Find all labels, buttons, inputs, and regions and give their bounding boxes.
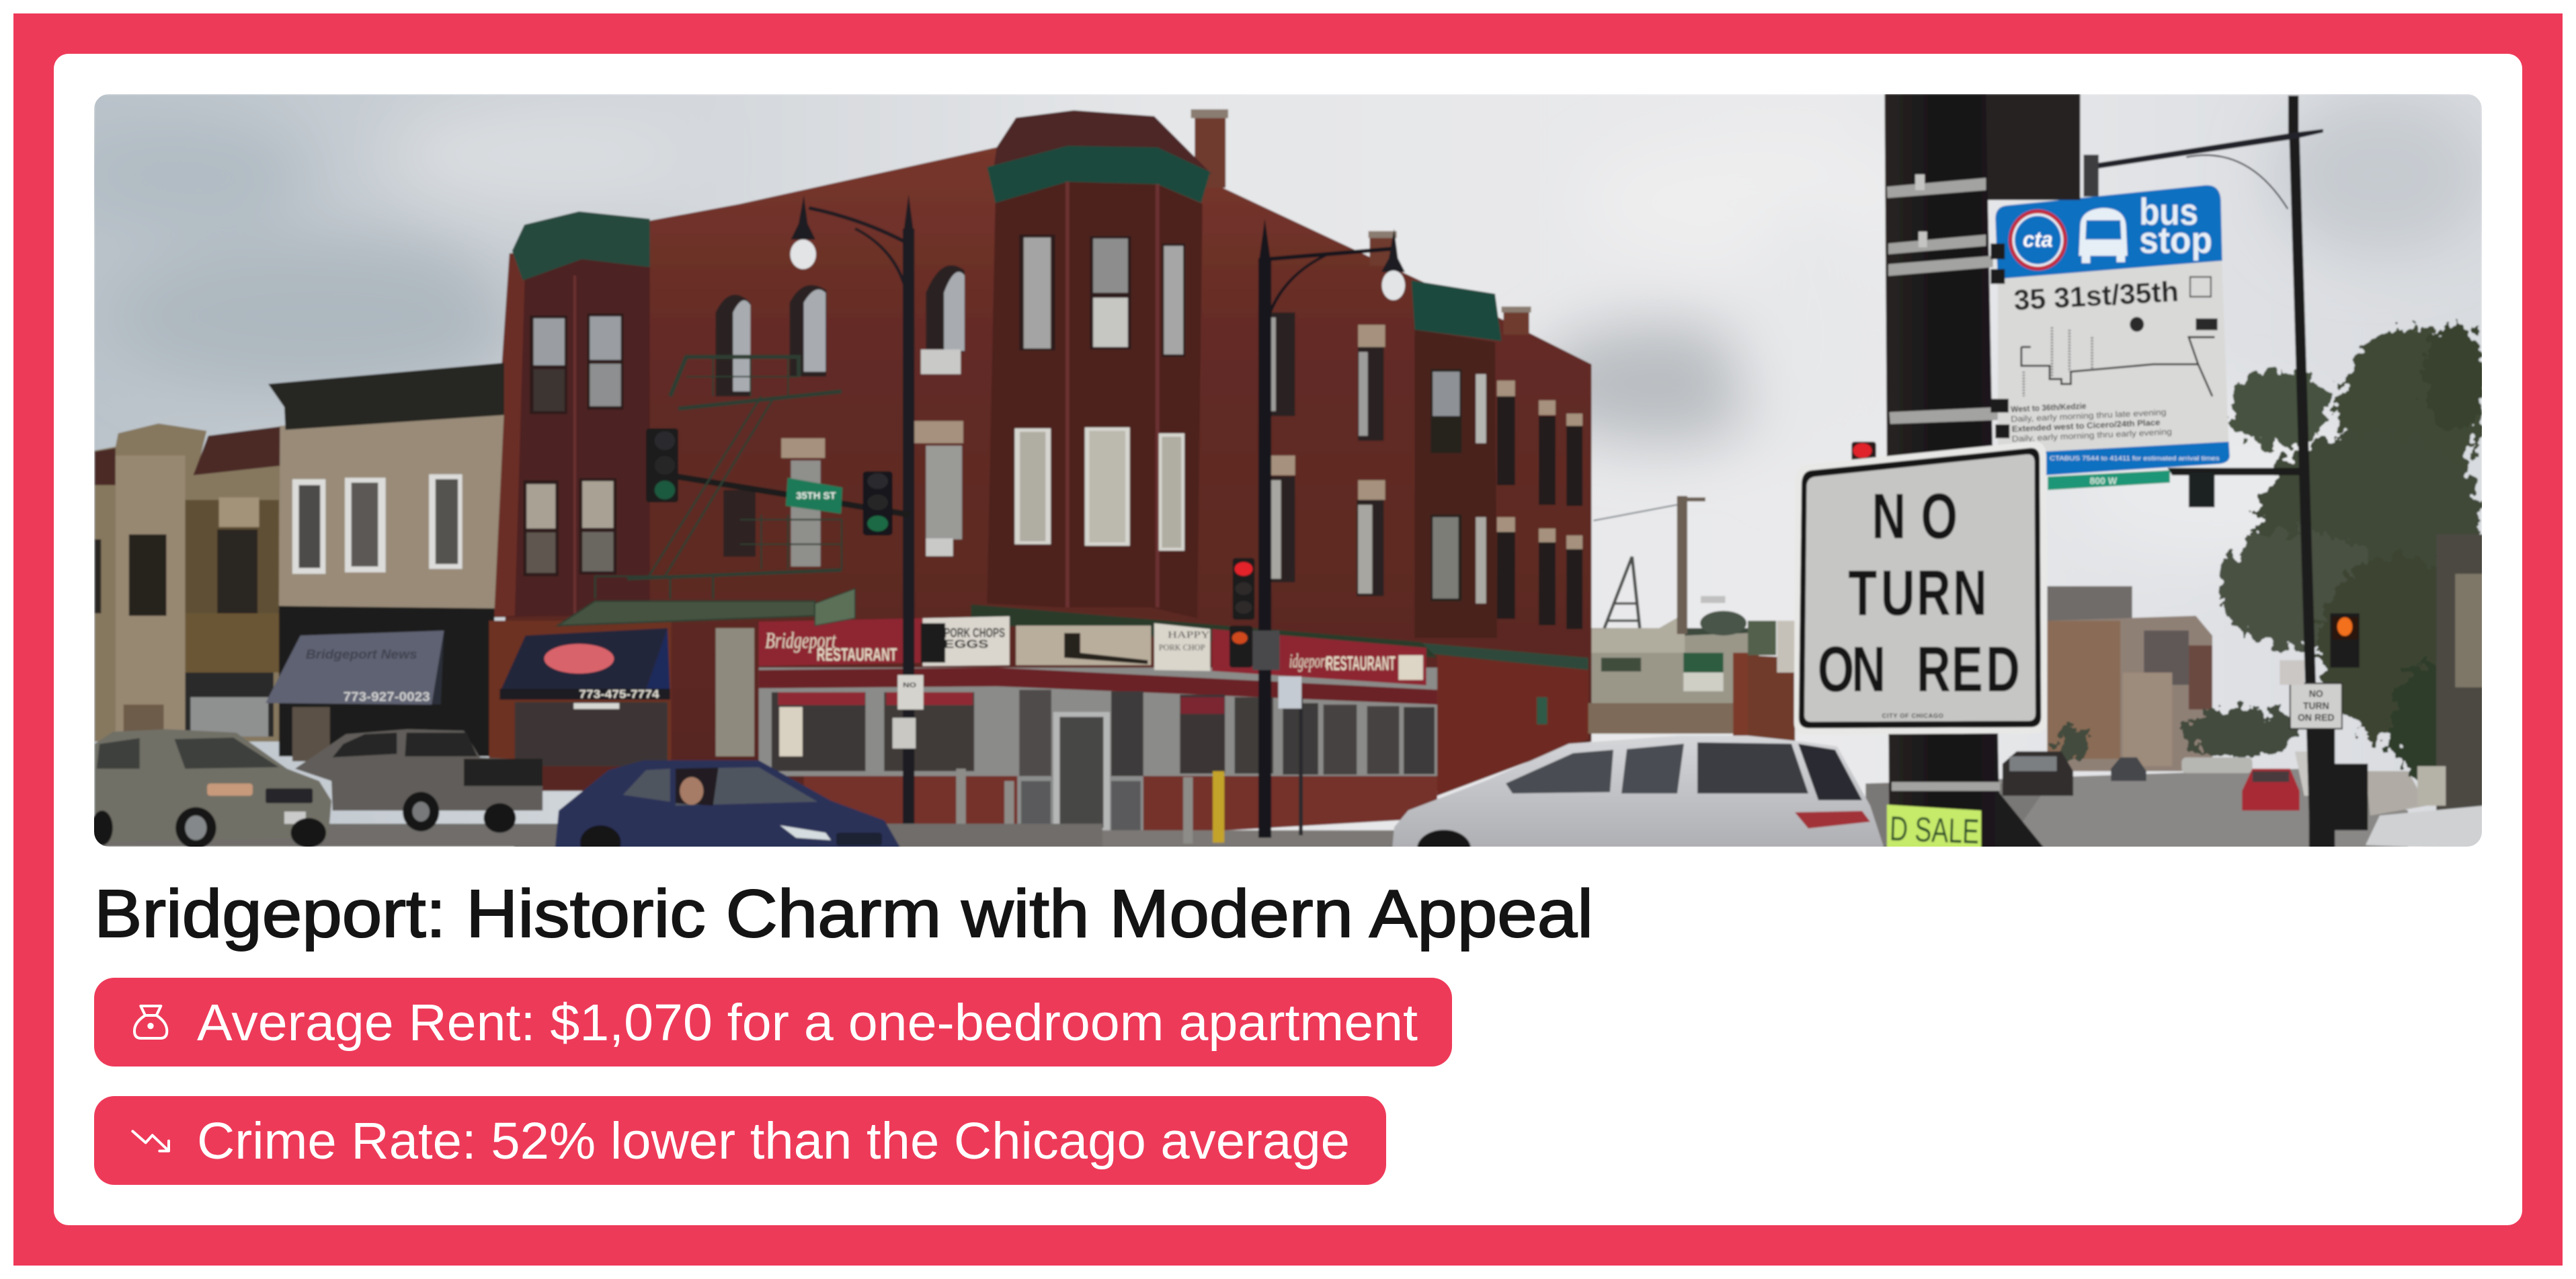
bus stop sign: Extended west to Cicero/24th Place: [2011, 418, 2161, 434]
brick storefront with dark awning: [489, 621, 672, 766]
bus stop sign: [1995, 185, 2230, 475]
red traffic signal: [1230, 558, 1280, 670]
restaurant front: [716, 605, 1437, 835]
restaurant signs: RESTAURANT: [817, 644, 897, 665]
restaurant signs: EGGS: [944, 637, 988, 651]
sky: [67, 94, 2487, 847]
CTA roundel: cta: [2023, 227, 2053, 251]
green street sign strip: [2048, 470, 2170, 490]
small no-turn sign: TURN: [2303, 701, 2329, 711]
route map: [2021, 337, 2214, 396]
sidewalk: [514, 830, 1421, 850]
street lamp one: [791, 194, 914, 838]
far trees: [2056, 707, 2295, 761]
no turn on red sign: NO: [1871, 480, 1958, 552]
pill: average rent: [94, 978, 1452, 1067]
light pole with bus sign arm: [2083, 95, 2323, 850]
main bay window: [987, 110, 1212, 618]
restaurant signs: RESTAURANT: [1326, 653, 1396, 674]
CTA roundel: [2009, 209, 2067, 270]
sidewalk right: [2366, 771, 2427, 816]
building behind tree: [2436, 535, 2483, 850]
icon: trending down arrow: [132, 1131, 169, 1151]
pedestrian signal: [2330, 613, 2360, 668]
left street surface: [94, 824, 1102, 847]
bus stop sign: Daily, early morning thru late evening: [2011, 408, 2167, 424]
grey awning: Bridgeport News: [306, 648, 417, 662]
small no-turn sign: ON RED: [2298, 713, 2335, 724]
yard sale poster: [1887, 805, 1981, 851]
far buildings and utility pole: [1588, 496, 1759, 736]
second bay window: [1412, 280, 1502, 638]
restaurant signs: idgeport: [1289, 651, 1328, 672]
grey awning: 773-927-0023: [344, 690, 430, 704]
no turn on red sign: CITY OF CHICAGO: [1882, 712, 1943, 720]
bus stop sign: 35 31st/35th: [2013, 275, 2179, 316]
distant cars: [2003, 751, 2483, 850]
bus stop sign: bus: [2139, 191, 2198, 233]
road: [1865, 769, 2408, 850]
grey awning: [266, 631, 444, 705]
small no-turn sign: [2280, 660, 2368, 850]
bus stop sign: stop: [2139, 219, 2212, 261]
yard sale poster: D SALE: [1889, 809, 1980, 851]
street lamp two: [1258, 219, 1405, 838]
traffic signal mast and street sign: [579, 461, 910, 535]
restaurant signs: HAPPY: [1168, 629, 1210, 640]
silver minivan: [1392, 736, 1884, 867]
red signal behind sign: [1851, 442, 1876, 461]
pill: average rent: Average Rent: $1,070 for a one-bedroom apartment: [197, 994, 1418, 1052]
corner signal and street signs: [893, 623, 945, 748]
chimneys: [1191, 110, 1531, 335]
bollards: [956, 676, 1303, 845]
left traffic signal: [646, 428, 678, 502]
no turn on red sign: ON RED: [1748, 633, 2020, 705]
corner signal and street signs: NO: [903, 681, 916, 689]
right background street: [1748, 94, 2488, 851]
green street sign strip: 800 W: [2090, 476, 2118, 487]
bus pictogram: [2079, 208, 2128, 263]
bus stop sign: West to 36th/Kedzie: [2011, 401, 2087, 414]
icon: money bag: [134, 1006, 167, 1038]
restaurant signs: PORK CHOP: [1159, 644, 1205, 653]
mid-distance buildings: [1748, 586, 2212, 771]
pickup truck: [295, 729, 542, 832]
brick storefront with dark awning: 773-475-7774: [579, 687, 659, 701]
bus stop sign: CTABUS 7544 to 41411 for estimated arrival times: [2050, 455, 2220, 462]
pill: crime rate: [94, 1096, 1386, 1185]
silver SUV: [91, 729, 331, 849]
small no-turn sign: NO: [2309, 689, 2323, 700]
fire escape: [558, 357, 855, 625]
traffic signal mast and street sign: 35TH ST: [796, 490, 836, 501]
blue sedan: [555, 761, 901, 860]
wall windows: [716, 266, 1582, 629]
large black pole: [1884, 94, 2081, 850]
heading: Bridgeport: Historic Charm with Modern Appeal: [94, 876, 1593, 952]
no turn on red sign: TURN: [1848, 557, 1987, 629]
restaurant signs: [759, 616, 1426, 685]
restaurant signs: PORK CHOPS: [944, 625, 1005, 640]
cream stone building: [268, 363, 504, 761]
left brick bay window: [493, 211, 650, 617]
restaurant side wall: [1421, 643, 1588, 796]
brick wall: [495, 147, 1591, 791]
tree: [2220, 322, 2488, 781]
restaurant signs: Bridgeport: [765, 628, 836, 653]
red brick corner building: [495, 110, 1759, 850]
no turn on red sign: [1748, 442, 2047, 734]
photo: Bridgeport street corner: [67, 94, 2488, 867]
ornate tan building: [95, 424, 284, 742]
pill: crime rate: Crime Rate: 52% lower than the Chicago average: [197, 1112, 1350, 1170]
left buildings: [95, 211, 672, 766]
bus stop sign: Daily, early morning thru early evening: [2011, 427, 2172, 444]
